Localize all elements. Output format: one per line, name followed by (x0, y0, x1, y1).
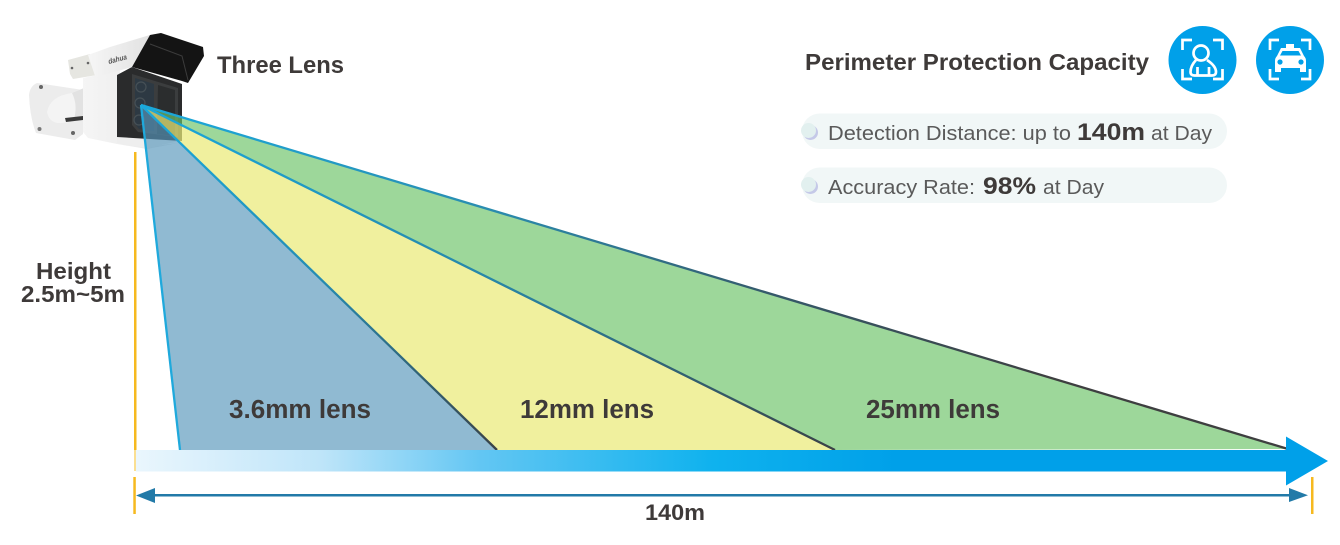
label: height: Height (36, 258, 111, 284)
row: detection distance: Detection Distance: up to (828, 122, 1071, 145)
height marker line (134, 152, 136, 450)
left end marker (133, 477, 136, 514)
label: camera brand: dahua (107, 52, 128, 66)
black hood (132, 33, 204, 83)
cone edge: far boundary (141, 105, 1288, 449)
front face (117, 67, 182, 141)
gradient distance arrow (136, 436, 1328, 486)
label: height (21, 258, 125, 307)
label: 3.6mm lens: 3.6mm lens (229, 396, 371, 424)
heading: three lens: Three Lens (217, 52, 344, 79)
cone: 12mm lens (141, 105, 835, 450)
right end marker (1311, 477, 1314, 514)
dimension arrow: 140m (136, 488, 1308, 503)
row: accuracy rate: at Day (1043, 176, 1105, 199)
icon: security camera (29, 33, 204, 149)
cone edge: 3.6mm to 12mm (141, 105, 497, 450)
label: 25mm lens: 25mm lens (866, 396, 1000, 424)
cone edge: 12mm to 25mm (141, 105, 835, 450)
label: 140m: 140m (645, 500, 705, 525)
row: detection distance: at Day (1151, 122, 1213, 145)
icon: vehicle detection (1256, 26, 1324, 94)
front bracket (68, 54, 97, 79)
row: accuracy rate: Accuracy Rate: (828, 176, 975, 199)
heading: perimeter protection capacity: Perimeter Protection Capacity (805, 49, 1149, 75)
height marker faded end (134, 450, 136, 471)
row: accuracy rate: 98% (983, 173, 1036, 200)
white hood (88, 33, 161, 76)
cone: 25mm lens (141, 105, 1288, 450)
label: 12mm lens: 12mm lens (520, 396, 654, 424)
cone: 3.6mm lens (141, 105, 497, 450)
wall plate (29, 83, 83, 140)
row: accuracy rate (801, 168, 1227, 203)
icon: person detection (1168, 26, 1236, 94)
cone edge: near boundary (141, 105, 180, 450)
body (83, 70, 178, 149)
row: detection distance (801, 114, 1227, 149)
label: height: 2.5m~5m (21, 281, 125, 307)
row: detection distance: 140m (1077, 119, 1145, 146)
